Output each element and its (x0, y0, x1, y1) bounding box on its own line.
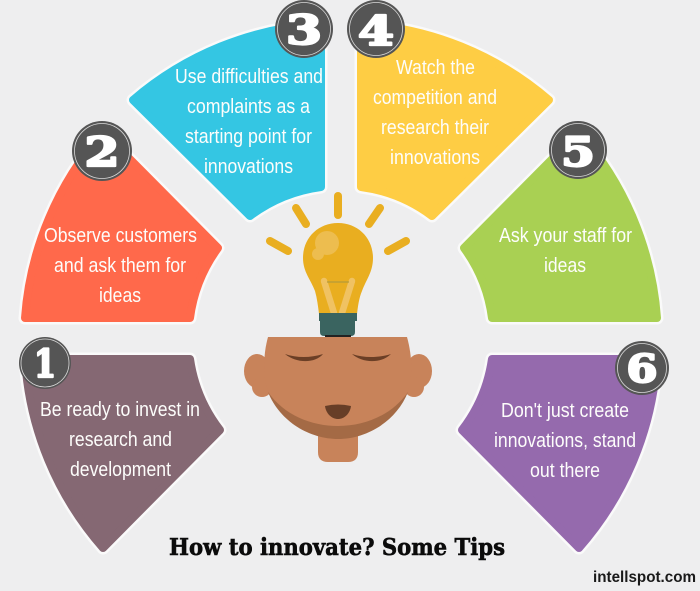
panel 1: mauve tip: development (70, 459, 171, 481)
badge 5: 5 (561, 129, 595, 176)
panel 3: cyan tip: innovations (204, 156, 293, 178)
face (264, 337, 411, 426)
badge 6 (615, 341, 669, 395)
badge 4 (347, 0, 405, 58)
neck (318, 430, 358, 462)
icon: light bulb (303, 223, 373, 338)
panel 2: orange tip: Observe customers (44, 225, 197, 247)
icon: head (244, 337, 432, 462)
badge 4: 4 (358, 8, 394, 55)
panel 6: purple tip: out there (530, 460, 600, 482)
panel 4: yellow tip: research their (381, 117, 489, 139)
chin shadow (268, 392, 408, 439)
panel 4: yellow tip: competition and (373, 87, 497, 109)
badge 1 (19, 337, 71, 389)
panel 3: cyan tip: complaints as a (187, 96, 311, 118)
badge 1: 1 (34, 341, 56, 386)
right eye (352, 354, 391, 361)
icon: light rays (270, 196, 406, 251)
right ear (404, 354, 432, 397)
badge 2: 2 (84, 129, 120, 176)
source credit: intellspot.com (593, 569, 696, 586)
left eye (285, 354, 323, 361)
left ear (244, 354, 272, 397)
panel 5: green tip: Ask your staff for (499, 225, 632, 247)
panel 2: orange tip: ideas (99, 285, 141, 307)
panel 4: yellow tip: innovations (390, 147, 480, 169)
panel 2: orange tip (25, 132, 218, 318)
panel 1: mauve tip: Be ready to invest in (40, 399, 200, 421)
panel 5: green tip (464, 132, 657, 318)
badge 5 (549, 121, 607, 179)
badge 2 (72, 121, 132, 181)
panel 4: yellow tip (361, 24, 549, 216)
panel 3: cyan tip: starting point for (185, 126, 312, 148)
title: How to innovate? Some Tips (169, 534, 505, 561)
panel 5: green tip: ideas (544, 255, 586, 277)
panel 3: cyan tip: Use difficulties and (175, 66, 323, 88)
mouth (325, 404, 351, 419)
panel 4: yellow tip: Watch the (396, 57, 475, 79)
panel 1: mauve tip: research and (69, 429, 172, 451)
badge 6: 6 (626, 346, 658, 391)
panel 3: cyan tip (133, 24, 323, 216)
panel 2: orange tip: and ask them for (54, 255, 186, 277)
panel 1: mauve tip (25, 359, 220, 548)
badge 3 (275, 0, 333, 58)
panel 6: purple tip (462, 359, 657, 548)
panel 6: purple tip: innovations, stand (494, 430, 636, 452)
badge 3: 3 (286, 7, 322, 54)
panel 6: purple tip: Don't just create (501, 400, 629, 422)
